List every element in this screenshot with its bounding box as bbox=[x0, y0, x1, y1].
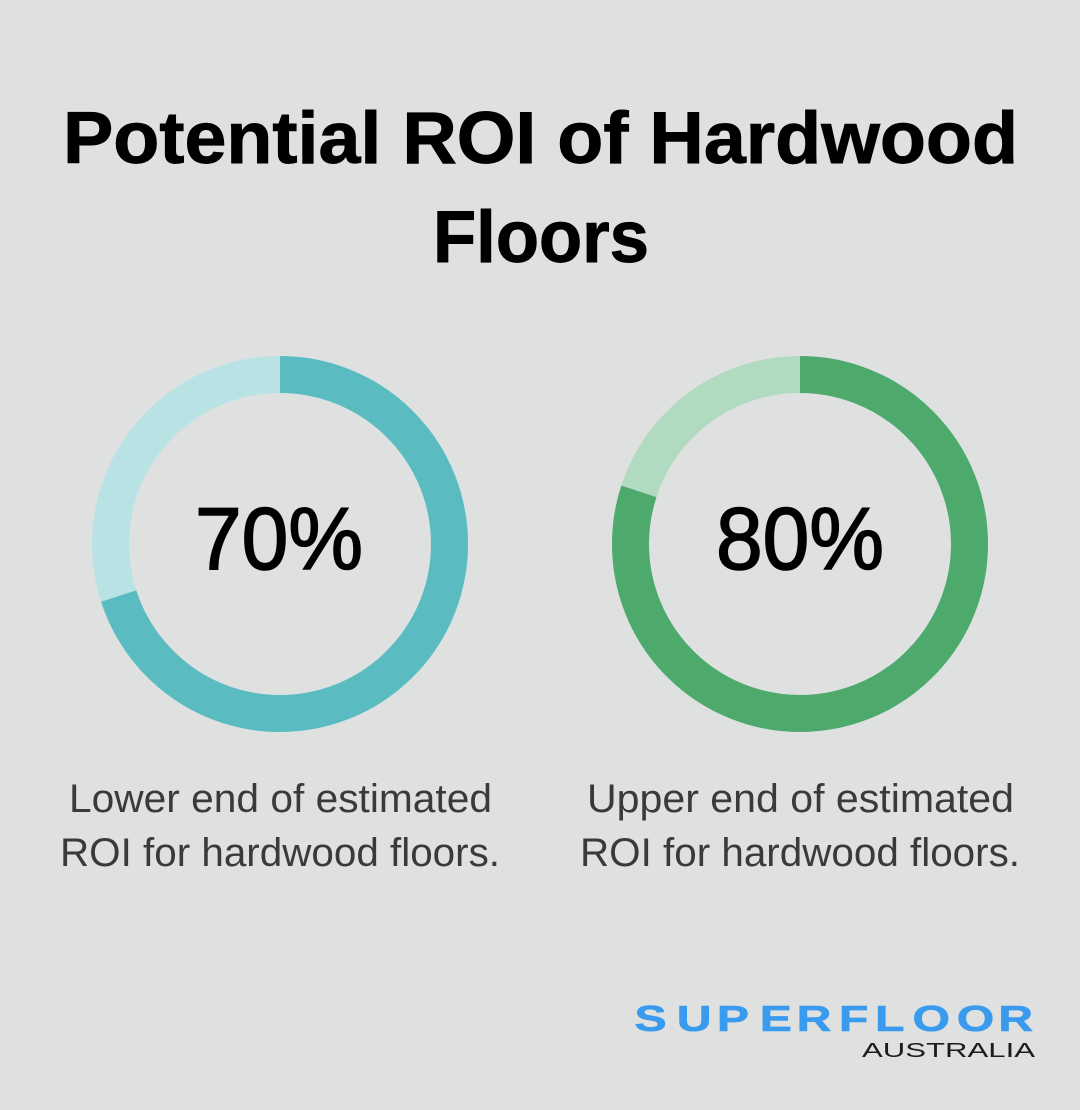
stat: 80%: 80% bbox=[716, 489, 884, 588]
description: upper end bbox=[580, 777, 1020, 875]
description: lower end: ROI for hardwood floors. bbox=[60, 831, 500, 875]
title: Floors bbox=[433, 197, 649, 278]
panel: upper end ROI bbox=[580, 374, 1020, 875]
donut chart: 70% bbox=[110, 374, 450, 714]
title: Potential ROI of Hardwood bbox=[63, 98, 1018, 179]
description: lower end: Lower end of estimated bbox=[69, 777, 492, 821]
description: upper end: ROI for hardwood floors. bbox=[580, 831, 1020, 875]
logo: Superfloor Australia: SUPERFLOOR bbox=[634, 999, 1033, 1039]
logo: Superfloor Australia: AUSTRALIA bbox=[862, 1040, 1036, 1062]
panel: lower end ROI bbox=[60, 374, 500, 875]
logo: Superfloor Australia bbox=[634, 999, 1036, 1062]
description: lower end bbox=[60, 777, 500, 875]
donut chart: 80% bbox=[630, 374, 970, 714]
stat: 70%: 70% bbox=[195, 489, 363, 588]
title bbox=[63, 98, 1018, 278]
description: upper end: Upper end of estimated bbox=[587, 777, 1014, 821]
